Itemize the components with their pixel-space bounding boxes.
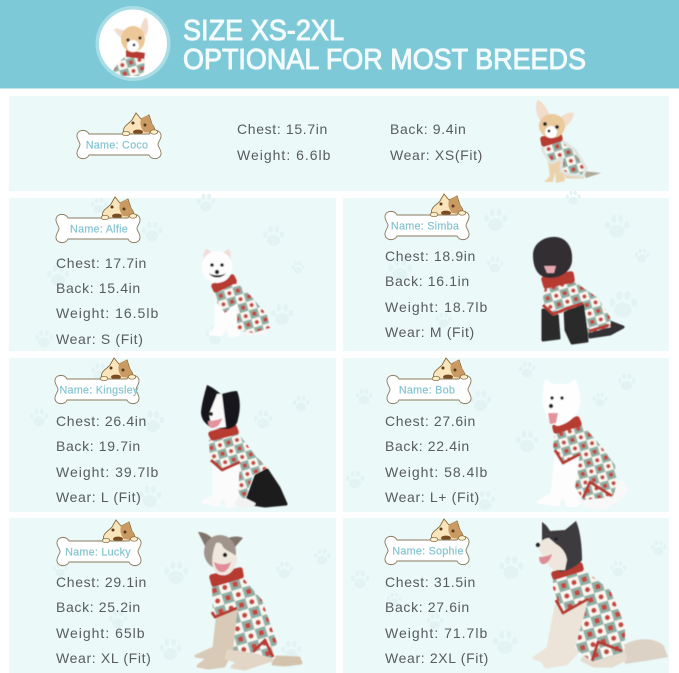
paw prints — [30, 363, 310, 507]
title — [183, 15, 586, 76]
stats: Kingsley — [56, 413, 159, 505]
panel: Coco — [9, 96, 669, 191]
name tag: Lucky: Name: Lucky — [65, 546, 131, 558]
stats: Lucky: Wear: XL (Fit) — [56, 650, 151, 666]
stats: Alfie: Chest: 17.7in — [56, 255, 147, 271]
name tag: Sophie: Name: Sophie — [392, 545, 464, 557]
stats: Lucky: Chest: 29.1in — [56, 574, 147, 590]
stats: Bob: Chest: 27.6in — [385, 413, 476, 429]
stats: Kingsley: Weight: 39.7lb — [56, 464, 159, 480]
name tag: Bob: Name: Bob — [399, 384, 455, 396]
title: SIZE XS-2XL — [183, 15, 344, 47]
dog photo: Alfie — [202, 249, 270, 336]
stats: Sophie: Wear: 2XL (Fit) — [385, 650, 489, 666]
stats: Bob: Wear: L+ (Fit) — [385, 489, 480, 505]
paw prints — [346, 362, 636, 510]
icon: chihuahua badge — [96, 6, 170, 81]
paw prints — [53, 549, 331, 660]
dog photo: Simba — [533, 237, 623, 343]
stats: Kingsley: Wear: L (Fit) — [56, 489, 141, 505]
stats: Simba: Back: 16.1in — [385, 273, 470, 289]
name tag: Coco: Name: Coco — [86, 139, 148, 151]
stats: Alfie — [56, 255, 159, 347]
stats: Coco: Back: 9.4in — [390, 121, 466, 137]
stats: Coco: Weight: 6.6lb — [237, 147, 331, 163]
dog photo: Sophie — [534, 521, 668, 667]
stats: Bob: Weight: 58.4lb — [385, 464, 488, 480]
stats: Simba: Wear: M (Fit) — [385, 324, 475, 340]
panel: Simba — [343, 191, 669, 351]
stats: Alfie: Wear: S (Fit) — [56, 331, 144, 347]
dog photo: Kingsley — [201, 385, 286, 507]
stats: Bob: Back: 22.4in — [385, 438, 470, 454]
name tag: Alfie: Name: Alfie — [70, 223, 128, 235]
name tag: Coco — [77, 113, 161, 159]
stats: Alfie: Weight: 16.5lb — [56, 305, 159, 321]
stats: Simba: Chest: 18.9in — [385, 248, 476, 264]
stats: Simba: Weight: 18.7lb — [385, 299, 488, 315]
panel: Sophie — [343, 518, 669, 673]
stats: Simba — [385, 248, 488, 340]
stats: Sophie: Weight: 71.7lb — [385, 625, 488, 641]
stats: Sophie: Chest: 31.5in — [385, 574, 476, 590]
panel: Lucky — [9, 518, 336, 673]
stats: Kingsley: Chest: 26.4in — [56, 413, 147, 429]
title: OPTIONAL FOR MOST BREEDS — [183, 44, 586, 76]
dog photo: Coco — [536, 100, 601, 183]
stats: Alfie: Back: 15.4in — [56, 280, 141, 296]
stats: Lucky: Back: 25.2in — [56, 599, 141, 615]
header banner — [0, 0, 679, 88]
name tag: Lucky — [57, 520, 141, 566]
stats: Coco: Chest: 15.7in — [237, 121, 328, 137]
dog photo: Bob — [538, 379, 627, 508]
stats: Coco: Wear: XS(Fit) — [390, 147, 483, 163]
dog photo: Lucky — [196, 532, 301, 669]
paw prints — [388, 191, 650, 328]
stats: Lucky — [56, 574, 151, 666]
panel: Bob — [343, 358, 669, 512]
panel: Kingsley — [9, 358, 336, 512]
name tag: Sophie — [385, 519, 469, 565]
name tag: Kingsley — [55, 358, 139, 404]
paw prints — [35, 194, 305, 347]
stats: Kingsley: Back: 19.7in — [56, 438, 141, 454]
stats: Sophie — [385, 574, 489, 666]
name tag: Bob — [387, 358, 471, 404]
name tag: Kingsley: Name: Kingsley — [59, 384, 139, 396]
stats: Lucky: Weight: 65lb — [56, 625, 146, 641]
stats: Coco — [237, 121, 483, 163]
panel: Alfie — [9, 194, 336, 351]
name tag: Simba: Name: Simba — [391, 220, 459, 232]
paw prints — [351, 541, 667, 654]
name tag: Alfie — [56, 197, 140, 243]
stats: Sophie: Back: 27.6in — [385, 599, 470, 615]
stats: Bob — [385, 413, 488, 505]
name tag: Simba — [385, 194, 469, 240]
